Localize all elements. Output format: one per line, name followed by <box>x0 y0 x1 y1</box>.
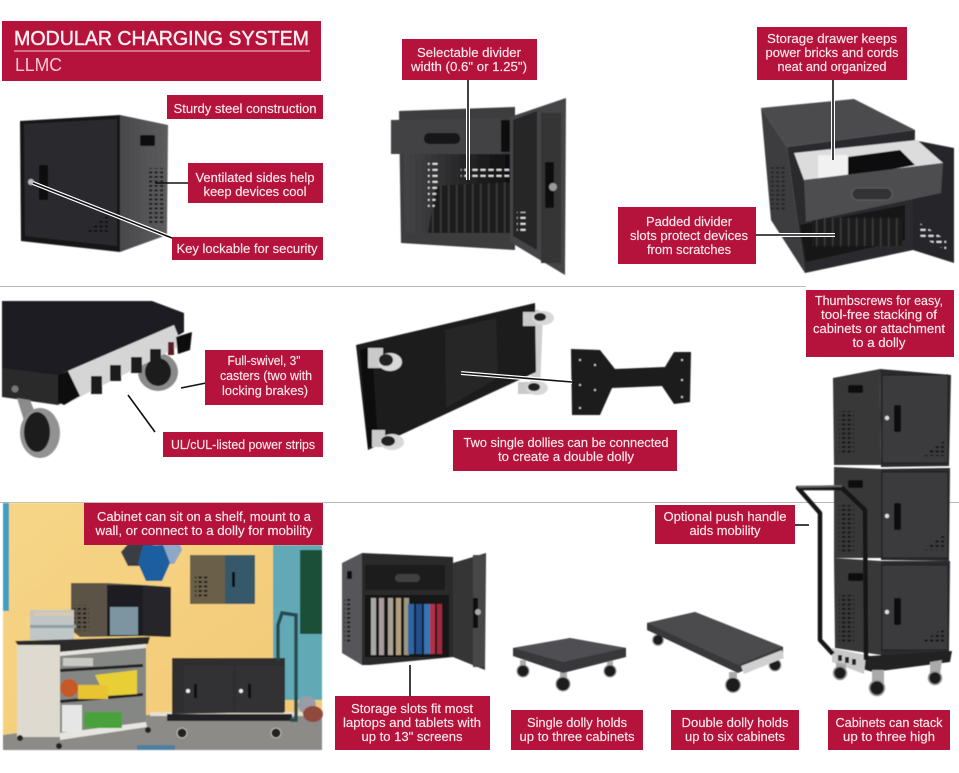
callout: cabinet placement <box>84 503 323 545</box>
callout: key lockable <box>172 237 323 260</box>
callout: storage slots <box>335 696 490 750</box>
callout: cabinet placement: wall, or connect to a dolly for mobility <box>94 524 313 538</box>
callout: double dolly <box>671 710 799 750</box>
callout: sturdy steel: Sturdy steel construction <box>174 102 317 116</box>
callout: thumbscrews: tool-free stacking of <box>821 308 938 322</box>
callout: selectable divider: Selectable divider <box>417 46 521 60</box>
callout: selectable divider: width (0.6" or 1.25") <box>410 60 527 74</box>
callout: two single dollies: to create a double dolly <box>498 450 635 464</box>
title: MODULAR CHARGING SYSTEM <box>14 28 309 50</box>
callout: padded divider <box>618 207 756 264</box>
callout: thumbscrews: to a dolly <box>852 336 906 350</box>
callout line: ventilated <box>155 182 188 184</box>
callout: single dolly: up to three cabinets <box>520 730 634 744</box>
product: closed cabinet <box>20 115 168 252</box>
callout: thumbscrews <box>806 290 954 357</box>
product: open cabinet with drawer <box>391 98 566 275</box>
photo: classroom scene <box>3 503 323 750</box>
callout: cabinet stack: up to three high <box>843 730 935 744</box>
callout: ventilated <box>188 163 323 203</box>
callout: cabinet stack <box>828 710 950 750</box>
product: single dolly <box>513 638 626 691</box>
callout: two single dollies: Two single dollies can be connected <box>464 436 669 450</box>
callout: two single dollies <box>453 430 677 471</box>
title: LLMC <box>15 55 62 75</box>
callout: key lockable: Key lockable for security <box>176 242 318 256</box>
callout: storage drawer: power bricks and cords <box>766 46 898 60</box>
callout: double dolly: Double dolly holds <box>682 716 788 730</box>
section divider bottom <box>0 502 959 504</box>
section divider top <box>0 286 806 288</box>
callout line: power strips <box>128 395 155 432</box>
callout: sturdy steel <box>167 95 323 119</box>
callout: padded divider: Padded divider <box>646 215 732 229</box>
product: three-cabinet stack on dolly with handle <box>798 369 952 696</box>
callout: storage slots: up to 13" screens <box>362 730 462 744</box>
connector line <box>461 373 572 382</box>
callout: casters: casters (two with <box>220 369 312 383</box>
callout: single dolly: Single dolly holds <box>527 716 627 730</box>
product: cabinet with tablets <box>342 553 486 670</box>
callout: double dolly: up to six cabinets <box>685 730 785 744</box>
callout line: storage slots <box>409 665 411 696</box>
callout: cabinet placement: Cabinet can sit on a shelf, mount to a <box>97 510 311 524</box>
product: dolly corner with power strip and casters <box>2 301 192 458</box>
title <box>2 21 321 81</box>
callout: storage drawer: Storage drawer keeps <box>767 32 897 46</box>
callout: casters <box>205 350 323 405</box>
callout: casters: locking brakes) <box>222 384 308 398</box>
callout line: storage drawer <box>831 80 835 160</box>
product: double dolly underside <box>356 303 554 450</box>
product: cabinet with open storage drawer <box>761 99 954 273</box>
callout: selectable divider <box>402 39 537 80</box>
callout: padded divider: from scratches <box>647 243 731 257</box>
callout: storage drawer: neat and organized <box>778 60 887 74</box>
callout: power strips <box>163 432 323 457</box>
callout: thumbscrews: Thumbscrews for easy, <box>815 294 943 308</box>
callout: push handle: aids mobility <box>690 524 761 538</box>
callout: storage drawer <box>757 27 907 80</box>
callout: push handle: Optional push handle <box>664 510 787 524</box>
callout line: divider width <box>466 80 470 180</box>
callout: casters: Full-swivel, 3" <box>228 354 300 368</box>
callout line: push handle <box>795 524 809 526</box>
callout: storage slots: laptops and tablets with <box>343 716 481 730</box>
callout: storage slots: Storage slots fit most <box>351 702 474 716</box>
callout line: casters <box>181 383 206 388</box>
callout: single dolly <box>511 710 643 750</box>
callout: power strips: UL/cUL-listed power strips <box>171 438 315 452</box>
callout: ventilated: Ventilated sides help <box>196 171 315 185</box>
callout: padded divider: slots protect devices <box>630 229 748 243</box>
callout line: key lock <box>33 183 172 238</box>
product: double dolly <box>647 612 784 692</box>
callout: thumbscrews: cabinets or attachment <box>813 322 946 336</box>
product: connector plate <box>571 349 691 415</box>
callout: ventilated: keep devices cool <box>204 185 306 199</box>
callout line: padded divider <box>756 233 835 237</box>
callout: push handle <box>655 505 795 544</box>
callout: cabinet stack: Cabinets can stack <box>836 716 943 730</box>
